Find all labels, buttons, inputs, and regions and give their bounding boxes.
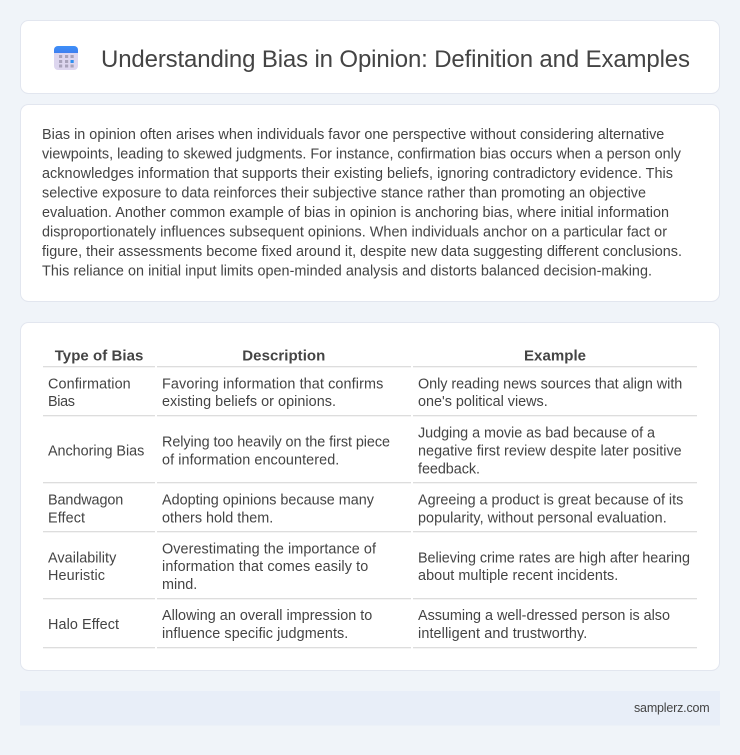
row: bandwagon effect: Agreeing a product is great because of its: [418, 492, 683, 508]
row: confirmation bias: existing beliefs or opinions.: [162, 394, 336, 410]
row: bandwagon effect: others hold them.: [162, 510, 273, 526]
row: confirmation bias: Bias: [48, 394, 75, 410]
table header row: [43, 348, 697, 367]
intro paragraph text: evaluation. Another common example of bias in opinion is anchoring bias, where initial information: [42, 205, 669, 221]
row: halo effect: Allowing an overall impression to: [162, 608, 372, 624]
row: availability heuristic: [43, 541, 697, 599]
table header row: Description: [242, 348, 325, 365]
intro paragraph card: [20, 104, 720, 302]
row: halo effect: influence specific judgments.: [162, 626, 348, 642]
row: availability heuristic: information that comes easily to: [162, 559, 368, 575]
table card: [20, 322, 720, 670]
row: availability heuristic: Believing crime rates are high after hearing: [418, 550, 690, 566]
row: anchoring bias: Relying too heavily on the first piece: [162, 435, 390, 451]
header card: [20, 20, 720, 94]
table header row: Example: [524, 348, 586, 365]
row: anchoring bias: [43, 426, 697, 483]
intro paragraph text: Bias in opinion often arises when individuals favor one perspective without considering alternative: [42, 127, 664, 143]
intro paragraph text: selective exposure to data reinforces their subjective stance rather than promoting an objective: [42, 186, 646, 202]
row: halo effect: Assuming a well-dressed person is also: [418, 608, 670, 624]
row: confirmation bias: [43, 376, 697, 416]
row: availability heuristic: about multiple recent incidents.: [418, 568, 618, 584]
row: availability heuristic: Overestimating the importance of: [162, 541, 377, 557]
intro paragraph text: This reliance on initial input limits open-minded analysis and distorts balanced decision-making.: [42, 264, 652, 280]
intro paragraph text: figure, their assessments become fixed around it, despite new data suggesting different conclusions.: [42, 244, 682, 260]
row: availability heuristic: mind.: [162, 577, 197, 593]
row: confirmation bias: Favoring information that confirms: [162, 376, 383, 392]
footer text: samplerz.com: [634, 701, 710, 715]
row: halo effect: Halo Effect: [48, 617, 119, 633]
row: anchoring bias: feedback.: [418, 462, 480, 478]
intro paragraph text: acknowledges information that supports their existing beliefs, ignoring contradictory evidence. This: [42, 166, 673, 182]
row: bandwagon effect: Bandwagon: [48, 492, 123, 508]
intro paragraph text: disproportionately influences subsequent opinions. When individuals anchor on a particular fact or: [42, 224, 667, 240]
title: Understanding Bias in Opinion: Definition and Examples: [101, 46, 690, 73]
row: availability heuristic: Availability: [48, 550, 117, 566]
intro paragraph text: viewpoints, leading to skewed judgments. For instance, confirmation bias occurs when a person only: [42, 146, 682, 162]
row: confirmation bias: Only reading news sources that align with: [418, 376, 682, 392]
footer bar: [20, 691, 720, 726]
row: anchoring bias: Judging a movie as bad because of a: [418, 426, 655, 442]
row: bandwagon effect: popularity, without personal evaluation.: [418, 510, 667, 526]
row: anchoring bias: negative first review despite later positive: [418, 444, 682, 460]
icon: calendar: [54, 46, 78, 70]
row: halo effect: [43, 608, 697, 648]
row: bandwagon effect: Effect: [48, 510, 85, 526]
row: confirmation bias: one's political views.: [418, 394, 548, 410]
row: anchoring bias: Anchoring Bias: [48, 444, 144, 460]
row: bandwagon effect: [43, 492, 697, 532]
row: halo effect: intelligent and trustworthy.: [418, 626, 587, 642]
intro paragraph text: [42, 127, 682, 280]
row: bandwagon effect: Adopting opinions because many: [162, 492, 375, 508]
table header row: Type of Bias: [55, 348, 143, 365]
row: confirmation bias: Confirmation: [48, 376, 131, 392]
row: anchoring bias: of information encountered.: [162, 452, 339, 468]
row: availability heuristic: Heuristic: [48, 568, 105, 584]
